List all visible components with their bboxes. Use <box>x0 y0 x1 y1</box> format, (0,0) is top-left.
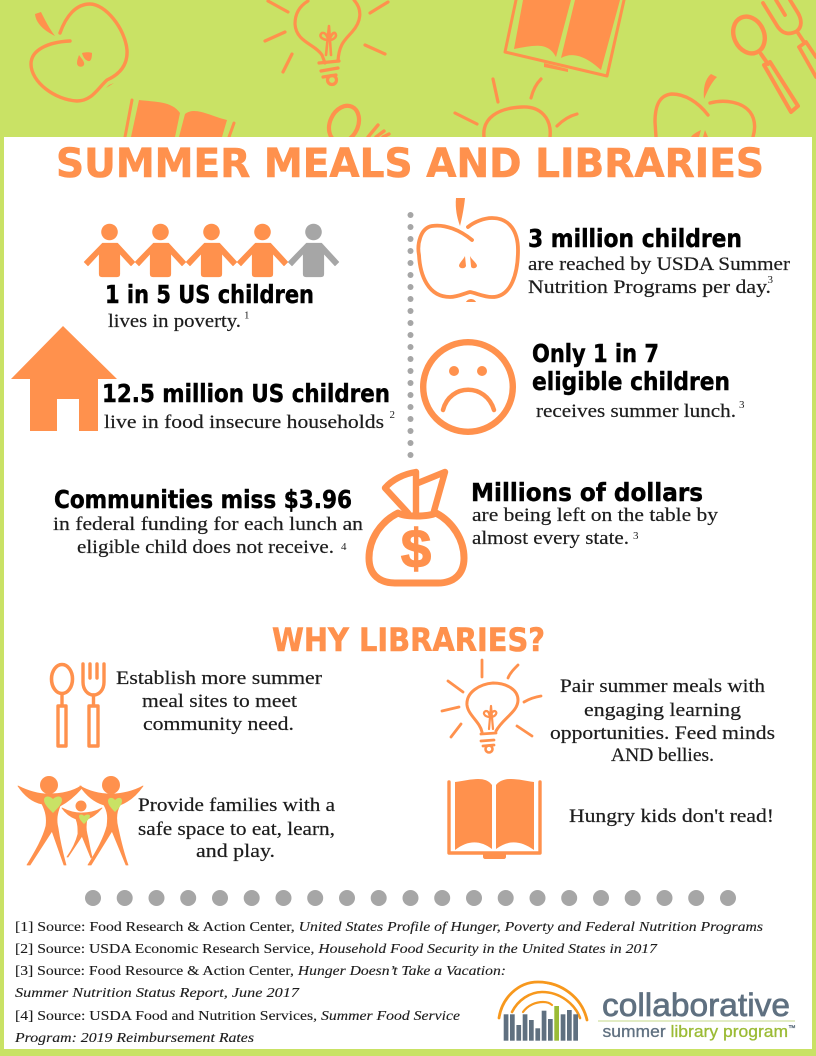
reason text: safe space to eat, learn, <box>138 820 335 840</box>
statistic text: eligible child does not receive. <box>77 538 334 558</box>
dotted divider <box>408 212 414 458</box>
icon: book bottom left <box>125 100 234 137</box>
panel: millions of dollars statistic <box>471 478 719 549</box>
icon: apple <box>418 198 518 302</box>
statistic heading: 12.5 million US children <box>102 379 390 408</box>
panel: family space reason <box>18 776 335 865</box>
panel: food insecurity statistic <box>11 326 395 433</box>
statistic heading <box>532 339 730 396</box>
logo wordmark: collaborative <box>602 987 790 1023</box>
statistic text: in federal funding for each lunch an <box>53 515 363 535</box>
panel: children reached statistic <box>418 198 790 302</box>
icon: apple bottom right <box>655 74 755 137</box>
logo tagline: summer library program <box>602 1023 781 1041</box>
footnote marker: 1 <box>244 310 250 322</box>
title: SUMMER MEALS AND LIBRARIES <box>56 141 764 187</box>
reason text <box>138 796 335 862</box>
reason text: meal sites to meet <box>142 692 298 712</box>
reason text <box>550 677 775 766</box>
footnotes <box>14 919 763 1045</box>
background icon pattern <box>31 0 816 147</box>
icon: spoon and fork top right <box>727 0 816 112</box>
statistic text: are reached by USDA Summer <box>528 255 790 275</box>
icon: light bulb bottom <box>455 79 577 137</box>
icon: open book <box>449 779 540 859</box>
icon: money bag <box>369 472 464 583</box>
panel: eligible children statistic <box>423 339 745 432</box>
reason text: Hungry kids don't read! <box>569 807 774 827</box>
panel: poverty statistic <box>84 224 338 332</box>
reason text <box>116 669 322 735</box>
footnotes: Program: 2019 Reimbursement Rates <box>14 1030 254 1045</box>
reason text: Establish more summer <box>116 669 322 689</box>
icon: sad face <box>423 342 513 432</box>
icon: book top <box>505 0 624 76</box>
panel: reading reason <box>449 779 774 859</box>
statistic heading: Only 1 in 7 <box>532 339 659 368</box>
statistic text: almost every state. <box>472 529 629 549</box>
logo mark: bars <box>504 1006 578 1041</box>
heading: why libraries: WHY LIBRARIES? <box>272 621 545 659</box>
statistic text <box>53 515 363 558</box>
statistic text: lives in poverty. <box>108 312 241 332</box>
footnote marker: 2 <box>390 409 395 421</box>
footnotes: Summer Nutrition Status Report, June 2017 <box>15 985 300 1000</box>
statistic heading: Communities miss $3.96 <box>54 485 352 514</box>
statistic heading: eligible children <box>532 367 730 396</box>
footnotes: [2] Source: USDA Economic Research Service, Household Food Security in the United States in 2017 <box>15 941 658 956</box>
footnotes: [1] Source: Food Research & Action Center, United States Profile of Hunger, Poverty and Federal Nutrition Programs <box>15 919 763 934</box>
panel: learning reason <box>442 660 775 766</box>
footnote marker: 3 <box>768 274 774 286</box>
reason text: opportunities. Feed minds <box>550 724 775 744</box>
reason text: community need. <box>143 715 294 735</box>
logo: collaborative summer library program <box>499 982 796 1041</box>
icon: money bag: $ <box>401 519 431 579</box>
icon: apple top left <box>31 4 127 101</box>
footnote marker: 3 <box>739 399 745 411</box>
icon: spoon and fork bottom <box>323 101 389 147</box>
reason text: AND bellies. <box>611 746 714 766</box>
icon: light bulb <box>442 660 541 752</box>
statistic text: are being left on the table by <box>472 506 719 526</box>
statistic text: receives summer lunch. <box>536 402 736 422</box>
reason text: Pair summer meals with <box>560 677 765 697</box>
icon: row of children <box>84 224 338 276</box>
logo rule <box>598 1020 795 1022</box>
panel: meal sites reason <box>52 664 322 746</box>
footnotes: [3] Source: Food Resource & Action Center, Hunger Doesn’t Take a Vacation: <box>15 963 506 978</box>
statistic text: Nutrition Programs per day. <box>528 278 771 298</box>
panel: federal funding statistic <box>53 485 363 558</box>
icon: light bulb top <box>265 0 388 84</box>
footnote marker: 3 <box>633 530 639 542</box>
icon: spoon and fork <box>52 664 104 746</box>
reason text: engaging learning <box>584 701 741 721</box>
footnote marker: 4 <box>341 541 347 553</box>
icon: house <box>11 326 117 431</box>
statistic heading: Millions of dollars <box>471 478 703 507</box>
reason text: and play. <box>196 842 275 862</box>
footnotes: [4] Source: USDA Food and Nutrition Services, Summer Food Service <box>15 1008 460 1023</box>
statistic heading: 3 million children <box>528 224 742 253</box>
icon: family <box>18 776 143 865</box>
statistic text: live in food insecure households <box>104 413 384 433</box>
statistic text <box>472 506 719 549</box>
statistic heading: 1 in 5 US children <box>105 280 314 309</box>
dotted separator <box>85 890 736 906</box>
logo mark: arcs <box>499 982 587 1020</box>
logo tagline: ™ <box>788 1025 796 1032</box>
reason text: Provide families with a <box>138 796 335 816</box>
statistic text <box>528 255 790 298</box>
